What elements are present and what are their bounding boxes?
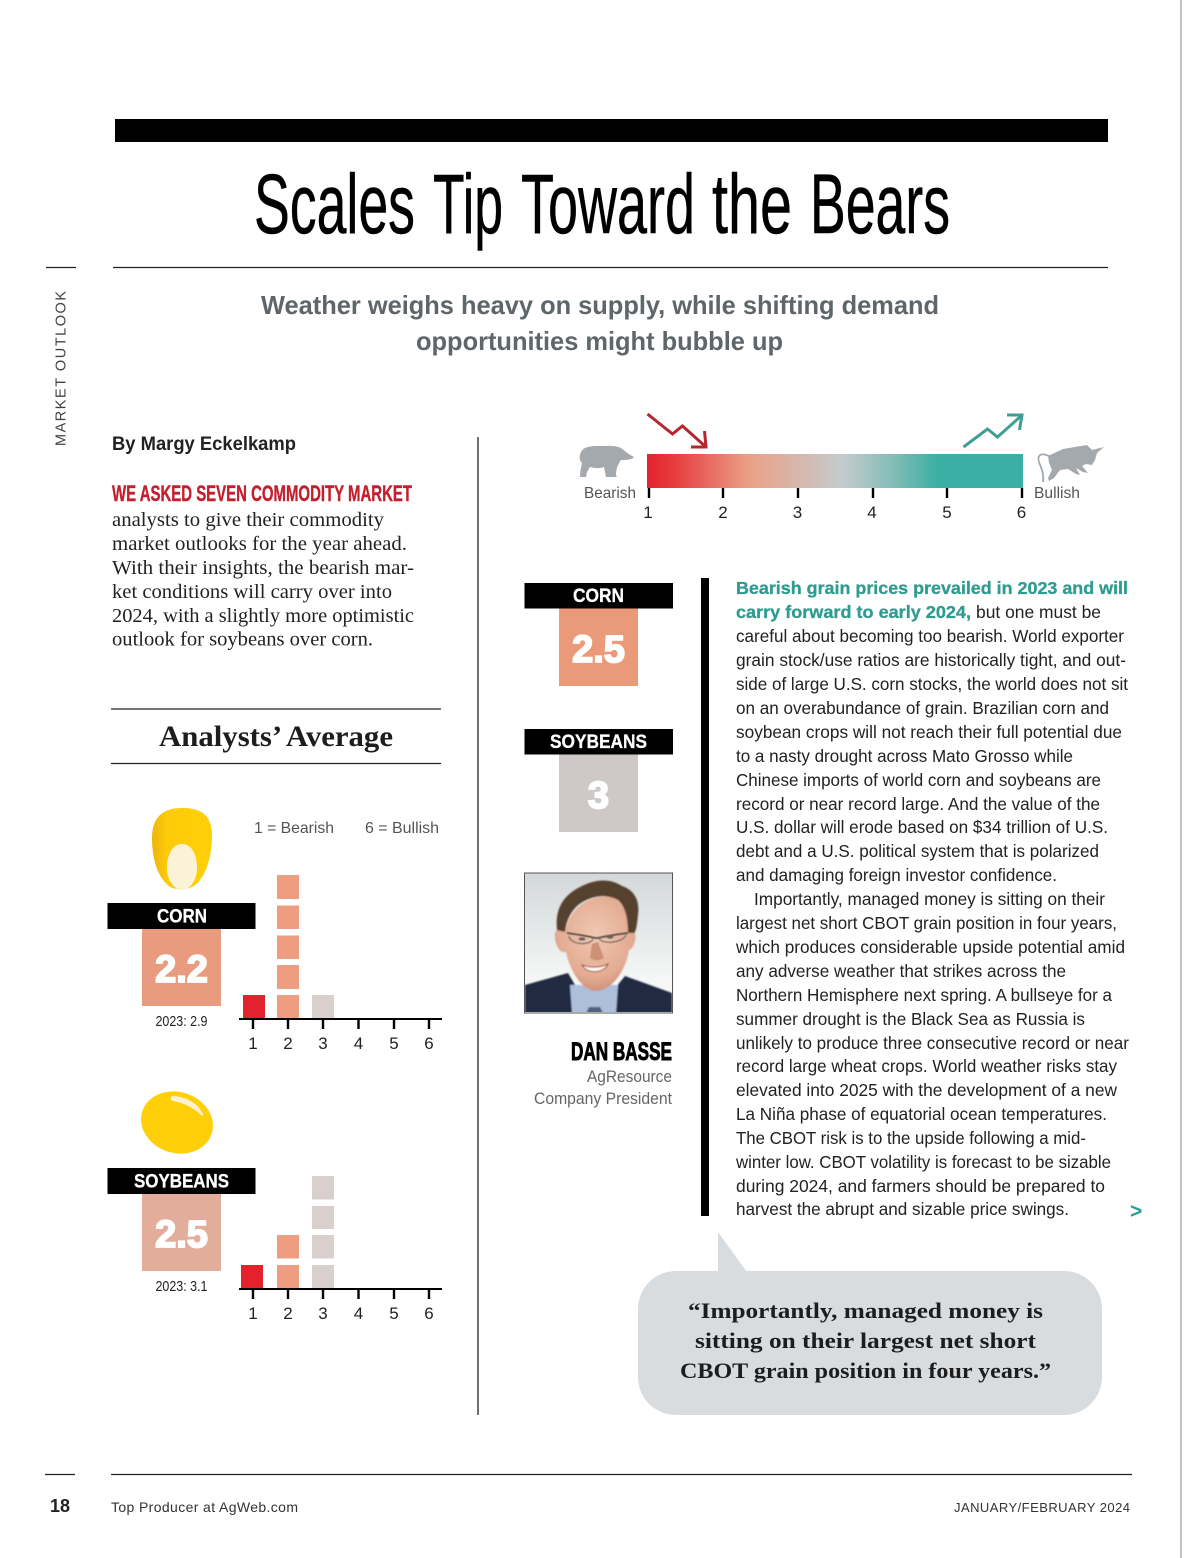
analyst commentary text: largest net short CBOT grain position in four years,: [736, 913, 1117, 933]
icon: bear: [580, 446, 634, 477]
byline: By Margy Eckelkamp: [112, 434, 296, 455]
sentiment scale bar: 5: [942, 503, 952, 522]
subtitle: opportunities might bubble up: [416, 326, 783, 356]
title: Scales: [254, 157, 415, 251]
footer: 18: [50, 1496, 70, 1516]
analyst name and title: Company President: [534, 1090, 672, 1108]
analyst commentary text: Bearish grain prices prevailed in 2023 and will: [736, 578, 1128, 598]
analyst commentary text: soybean crops will not reach their full potential due: [736, 722, 1122, 742]
intro text block: With their insights, the bearish mar-: [112, 558, 414, 579]
section tab: market outlook: MARKET OUTLOOK: [54, 291, 70, 446]
analyst commentary text: and damaging foreign investor confidence.: [736, 865, 1057, 885]
footer: Top Producer at AgWeb.com: [111, 1499, 298, 1515]
soybeans rating card: 2.5: [155, 1214, 208, 1256]
icon: soybean: [133, 1082, 221, 1163]
analyst commentary text: unlikely to produce three consecutive record or near: [736, 1033, 1129, 1053]
bar chart: soybean analyst votes: 2: [283, 1304, 293, 1323]
analyst commentary text: The CBOT risk is to the upside following a mid-: [736, 1128, 1086, 1148]
analyst commentary text: Northern Hemisphere next spring. A bullseye for a: [736, 985, 1112, 1005]
analyst commentary text: U.S. dollar will erode based on $34 trillion of U.S.: [736, 817, 1108, 837]
sentiment scale bar: 3: [793, 503, 802, 522]
subtitle: Weather weighs heavy on supply, while shifting demand: [261, 290, 939, 320]
analyst commentary text: [735, 578, 1129, 1219]
sentiment scale bar: Bullish: [1034, 485, 1080, 502]
bar chart: corn analyst votes: [239, 875, 442, 1053]
bar chart: corn analyst votes: 4: [354, 1034, 363, 1053]
analyst commentary text: side of large U.S. corn stocks, the world does not sit: [736, 674, 1128, 694]
corn rating card: [108, 903, 256, 1030]
legend: rating scale: 6 = Bullish: [365, 820, 439, 837]
callout: pull quote: sitting on their largest net short: [695, 1328, 1037, 1353]
analyst commentary text: on an overabundance of grain. Brazilian corn and: [736, 698, 1109, 718]
analyst commentary text: winter low. CBOT volatility is forecast to be sizable: [735, 1152, 1111, 1172]
title: Toward: [521, 157, 695, 251]
analyst commentary text: during 2024, and farmers should be prepared to: [736, 1176, 1105, 1196]
bar chart: soybean analyst votes: 4: [354, 1304, 363, 1323]
legend: rating scale: [254, 820, 439, 837]
title: the: [712, 157, 792, 251]
analyst name and title: DAN BASSE: [571, 1038, 672, 1066]
bar chart: corn analyst votes: 3: [318, 1034, 328, 1053]
soybeans rating card: 2023: 3.1: [156, 1278, 208, 1295]
top black banner: [115, 119, 1108, 142]
heading: analysts' average: Analysts’ Average: [159, 720, 393, 753]
corn forecast card: 2.5: [572, 629, 625, 671]
analyst commentary text: harvest the abrupt and sizable price swings.: [736, 1199, 1069, 1219]
intro text block: analysts to give their commodity: [112, 510, 384, 531]
arrow: bullish up: [964, 415, 1022, 447]
analyst commentary text: debt and a U.S. political system that is polarized: [736, 841, 1099, 861]
callout: pull quote: [638, 1232, 1102, 1415]
bar chart: soybean analyst votes: 5: [389, 1304, 399, 1323]
intro text block: outlook for soybeans over corn.: [112, 630, 373, 650]
analyst commentary text: careful about becoming too bearish. World exporter: [736, 626, 1124, 646]
continuation arrow: >: [1130, 1200, 1142, 1223]
bar chart: soybean analyst votes: 1: [248, 1304, 258, 1323]
analyst commentary text: elevated into 2025 with the development of a new: [736, 1080, 1117, 1100]
corn forecast card: CORN: [573, 586, 624, 607]
corn rating card: 2.2: [155, 949, 208, 991]
bar chart: soybean analyst votes: 6: [424, 1304, 434, 1323]
corn forecast card: [524, 583, 673, 686]
corn rating card: CORN: [157, 906, 207, 928]
footer: JANUARY/FEBRUARY 2024: [954, 1500, 1130, 1515]
intro text block: WE ASKED SEVEN COMMODITY MARKET: [112, 481, 412, 506]
intro text block: market outlooks for the year ahead.: [112, 534, 407, 555]
portrait: Dan Basse: [524, 873, 672, 1013]
analyst name and title: [534, 1038, 672, 1108]
analyst commentary text: record or near record large. And the value of the: [736, 794, 1100, 814]
bar chart: corn analyst votes: 5: [389, 1034, 399, 1053]
title: [254, 157, 950, 251]
soybeans forecast card: [524, 729, 673, 832]
legend: rating scale: 1 = Bearish: [254, 820, 334, 837]
analyst commentary text: any adverse weather that strikes across the: [736, 961, 1066, 981]
callout: pull quote: CBOT grain position in four years.”: [680, 1358, 1051, 1383]
analyst commentary text: carry forward to early 2024,: [736, 602, 971, 622]
icon: corn kernel: [152, 808, 212, 890]
sentiment scale bar: [584, 454, 1080, 522]
subtitle: [261, 290, 939, 356]
analyst commentary text: Chinese imports of world corn and soybeans are: [736, 770, 1101, 790]
corn rating card: 2023: 2.9: [156, 1013, 208, 1030]
bar chart: corn analyst votes: 6: [424, 1034, 434, 1053]
bar chart: soybean analyst votes: 3: [318, 1304, 328, 1323]
analyst commentary text: grain stock/use ratios are historically tight, and out-: [736, 650, 1126, 670]
soybeans forecast card: SOYBEANS: [550, 732, 647, 753]
intro text block: [112, 481, 414, 650]
icon: bull: [1038, 445, 1104, 482]
sentiment scale bar: Bearish: [584, 485, 636, 502]
sentiment scale bar: 2: [718, 503, 728, 522]
sentiment scale bar: 1: [643, 503, 653, 522]
callout: pull quote: “Importantly, managed money is: [688, 1298, 1043, 1323]
bar chart: soybean analyst votes: [239, 1176, 442, 1323]
analyst name and title: AgResource: [587, 1068, 672, 1086]
intro text block: ket conditions will carry over into: [112, 582, 392, 603]
footer: [45, 1474, 1132, 1516]
arrow: bearish down: [648, 414, 706, 447]
analyst commentary text: which produces considerable upside potential amid: [735, 937, 1125, 957]
bar chart: corn analyst votes: 1: [248, 1034, 258, 1053]
analyst commentary text: La Niña phase of equatorial ocean temperatures.: [736, 1104, 1107, 1124]
title: Tip: [433, 157, 503, 251]
soybeans rating card: [108, 1168, 256, 1295]
intro text block: 2024, with a slightly more optimistic: [112, 606, 414, 627]
analyst commentary text: but one must be: [976, 602, 1101, 622]
analyst commentary text: record large wheat crops. World weather risks stay: [736, 1056, 1117, 1076]
sentiment scale bar: 4: [867, 503, 877, 522]
sentiment scale bar: 6: [1017, 503, 1026, 522]
soybeans forecast card: 3: [588, 775, 609, 817]
analyst commentary text: summer drought is the Black Sea as Russia is: [736, 1009, 1085, 1029]
title: Bears: [810, 157, 950, 251]
soybeans rating card: SOYBEANS: [134, 1172, 229, 1192]
bar chart: corn analyst votes: 2: [283, 1034, 293, 1053]
analyst commentary text: Importantly, managed money is sitting on their: [754, 889, 1105, 909]
analyst commentary text: to a nasty drought across Mato Grosso while: [736, 746, 1073, 766]
